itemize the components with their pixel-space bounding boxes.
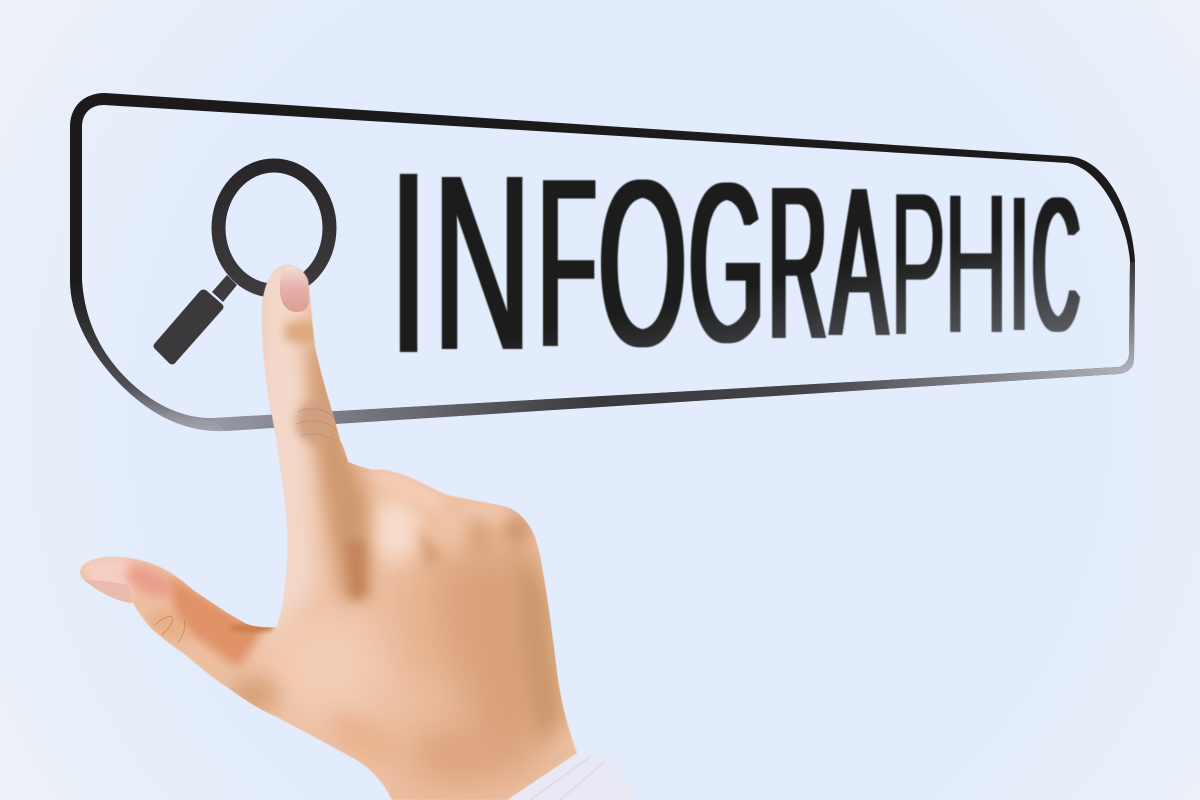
right edge highlight — [1120, 262, 1135, 373]
hand silhouette — [80, 265, 577, 800]
word: INFOGRAPHIC: F — [538, 128, 596, 397]
search bar — [70, 93, 1135, 431]
bottom edge highlight — [213, 362, 1134, 431]
word: INFOGRAPHIC: I — [1003, 157, 1035, 371]
hand pointing at search bar — [80, 260, 577, 800]
magnifier neck — [212, 275, 237, 302]
word: INFOGRAPHIC: C — [1033, 159, 1080, 371]
word: INFOGRAPHIC: H — [944, 153, 1008, 375]
word: INFOGRAPHIC: O — [599, 132, 686, 396]
thumb creases — [155, 616, 185, 643]
magnifier lens ring — [218, 166, 330, 290]
word: INFOGRAPHIC: N — [433, 123, 532, 402]
icon: magnifying glass — [154, 166, 330, 364]
thumb nail — [84, 580, 132, 603]
word: INFOGRAPHIC — [399, 173, 1081, 353]
word: INFOGRAPHIC: R — [768, 140, 827, 384]
search bar frame — [70, 93, 1135, 431]
shirt cuff — [507, 752, 640, 800]
word: INFOGRAPHIC: I — [383, 118, 435, 407]
hand shading — [80, 260, 562, 785]
word: INFOGRAPHIC: A — [831, 144, 887, 381]
index fingernail — [280, 266, 309, 312]
magnifier handle — [154, 290, 224, 364]
knuckle creases — [296, 409, 338, 442]
word: INFOGRAPHIC: G — [689, 136, 764, 389]
word: INFOGRAPHIC: P — [890, 151, 946, 377]
